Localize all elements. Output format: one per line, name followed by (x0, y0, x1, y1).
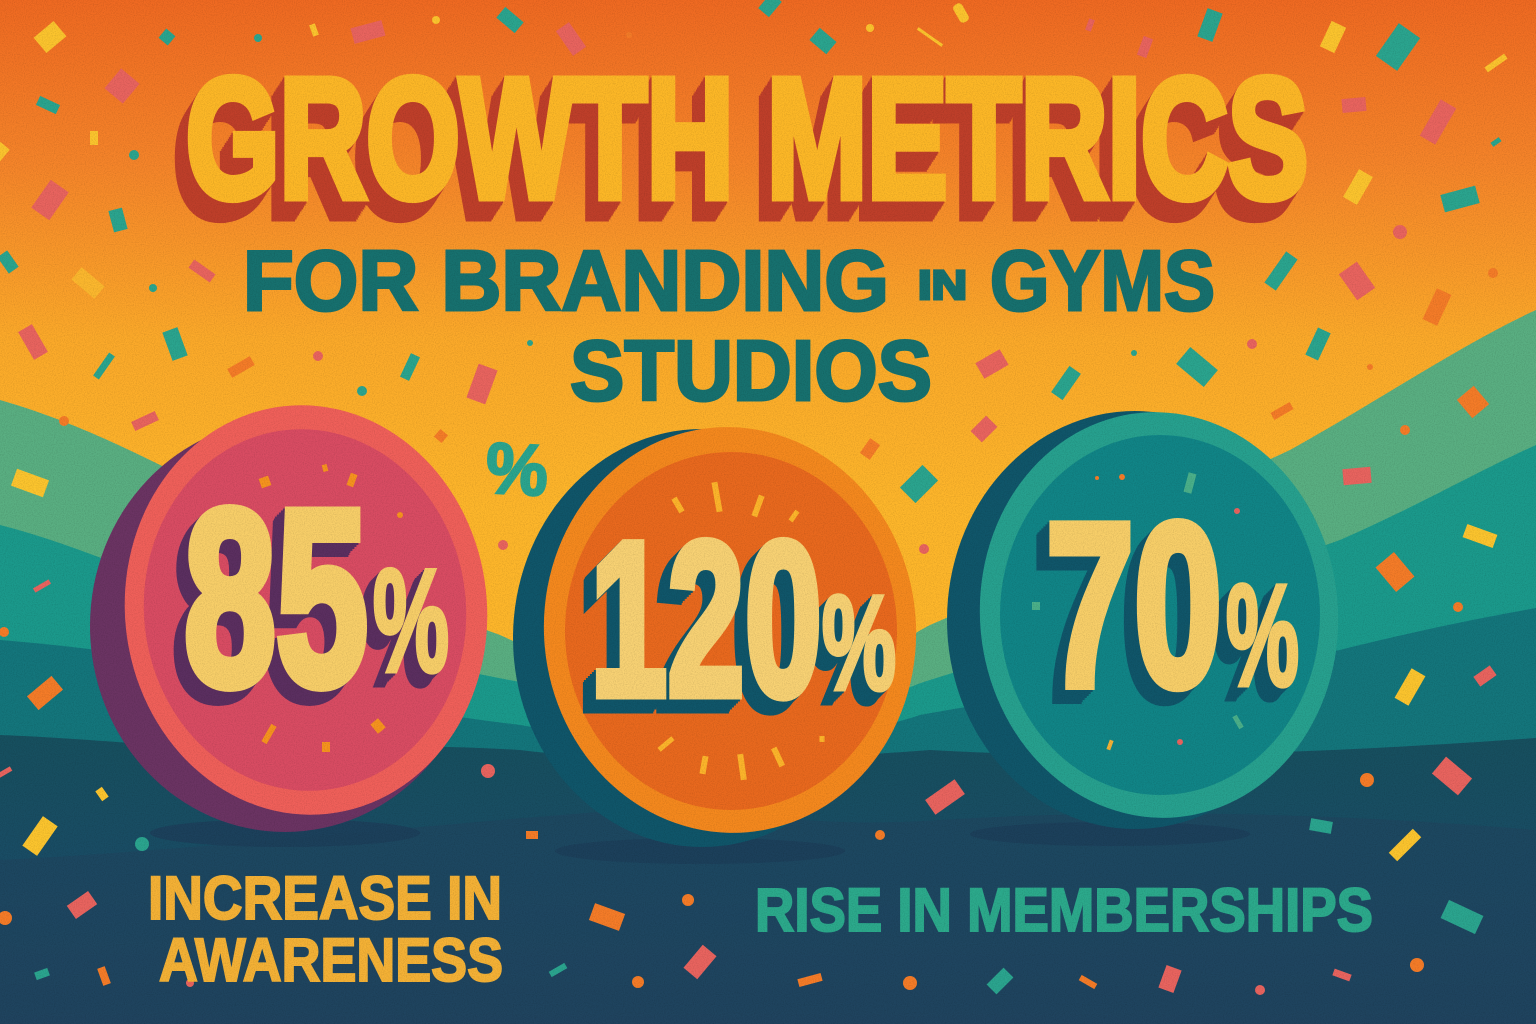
icon: floating percent sign: % (484, 428, 550, 512)
subtitle: IN (918, 262, 967, 308)
ground shadows under badges (150, 819, 1250, 864)
value: 120%: % (822, 569, 896, 718)
background: layered hills (0, 310, 1536, 1024)
caption: increase in awareness: INCREASE IN (148, 864, 502, 932)
value: 120%: 120 (590, 496, 822, 742)
burst marks (657, 482, 824, 780)
caption: increase in awareness: AWARENESS (159, 926, 503, 994)
value: 70%: 70 (1046, 476, 1222, 735)
value: 85%: 85 (184, 458, 368, 737)
value: 70%: % (1226, 555, 1299, 716)
caption: increase in awareness (148, 864, 503, 994)
subtitle: GYMS (990, 234, 1215, 329)
subtitle: STUDIOS (570, 324, 932, 419)
subtitle (243, 234, 1215, 419)
badge: 85% (90, 387, 507, 833)
badge: 120% (513, 412, 933, 848)
badge: 70% (947, 397, 1355, 833)
subtitle: FOR BRANDING (243, 234, 889, 329)
value: 85%: % (373, 539, 449, 702)
caption: rise in memberships: RISE IN MEMBERSHIPS (755, 876, 1373, 944)
burst marks (259, 464, 403, 752)
burst marks (1032, 472, 1244, 750)
